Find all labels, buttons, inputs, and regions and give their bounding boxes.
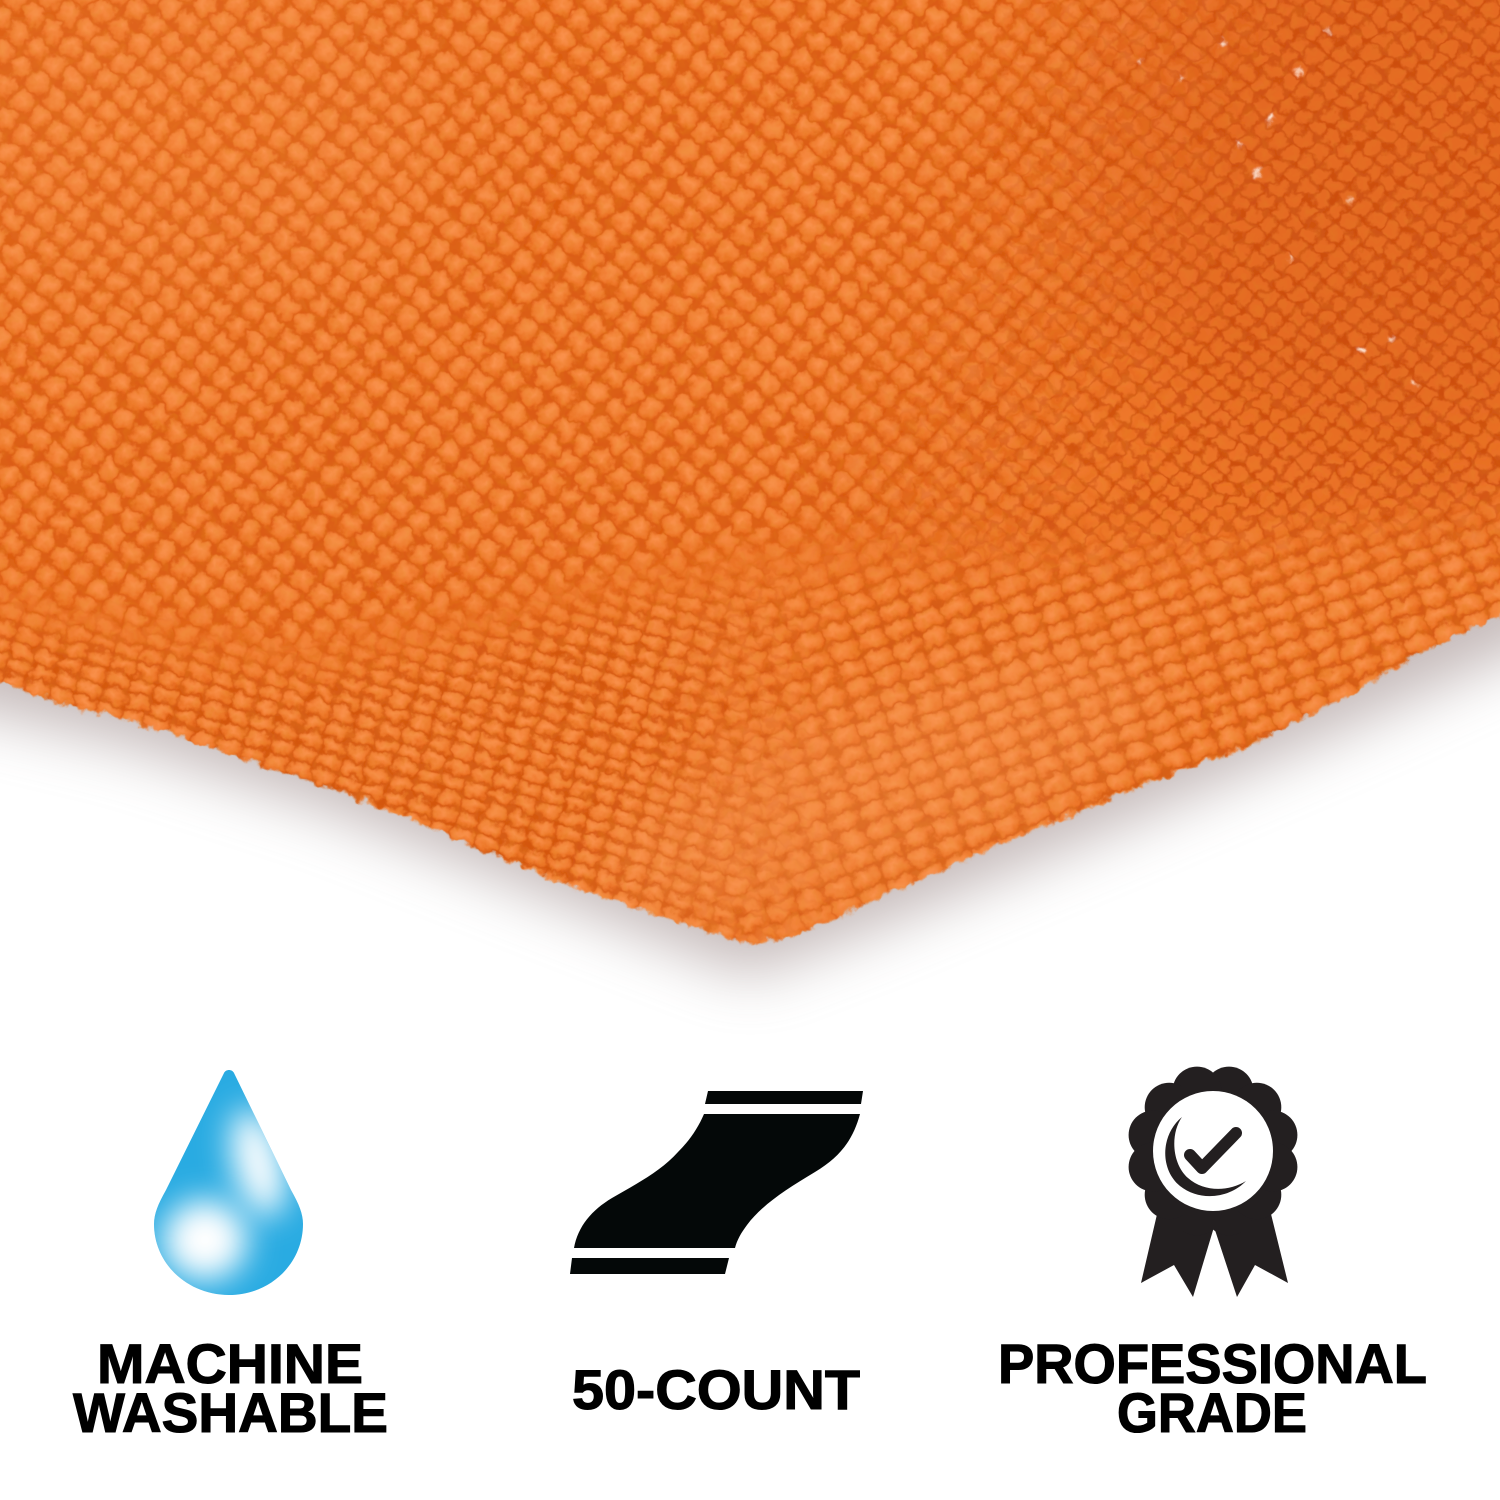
label: professional grade: GRADE bbox=[1117, 1381, 1307, 1444]
cloth base colour bbox=[0, 508, 1158, 714]
scalloped badge bbox=[1129, 1067, 1297, 1235]
label: machine washable: WASHABLE bbox=[73, 1381, 388, 1444]
feature: professional grade bbox=[998, 1067, 1427, 1444]
label: 50-count: 50-COUNT bbox=[572, 1358, 860, 1421]
check mark bbox=[1190, 1133, 1236, 1168]
icon: folded towel bbox=[570, 1091, 863, 1274]
label: professional grade: PROFESSIONAL bbox=[998, 1332, 1427, 1395]
upper weave texture bbox=[0, 0, 1334, 698]
foreground weave, left side bbox=[0, 510, 834, 942]
label: professional grade bbox=[998, 1332, 1427, 1444]
icon: award ribbon with check bbox=[1129, 1067, 1297, 1297]
icon: water drop bbox=[154, 1070, 303, 1295]
receding weave at top right bbox=[785, 0, 1500, 574]
photo: orange microfiber cloth bbox=[0, 0, 1500, 1000]
label: machine washable bbox=[73, 1332, 388, 1444]
ribbon tails bbox=[1141, 1210, 1288, 1297]
fibre mottling bbox=[0, 0, 1500, 1000]
cloth shadow bbox=[0, 560, 1500, 975]
label: machine washable: MACHINE bbox=[97, 1332, 363, 1395]
light specks through the weave bbox=[1138, 28, 1418, 384]
feature: machine washable bbox=[73, 1065, 388, 1444]
crescent swoosh bbox=[1165, 1117, 1246, 1196]
darker shading at top right bbox=[1100, 0, 1500, 470]
soft highlight on the corner bbox=[544, 645, 1162, 930]
foreground weave bbox=[0, 456, 1500, 943]
foreground weave, right side bbox=[637, 466, 1500, 944]
white badge centre bbox=[1153, 1091, 1273, 1211]
highlight at top left bbox=[0, 0, 480, 330]
feature: 50-count bbox=[570, 1091, 863, 1421]
